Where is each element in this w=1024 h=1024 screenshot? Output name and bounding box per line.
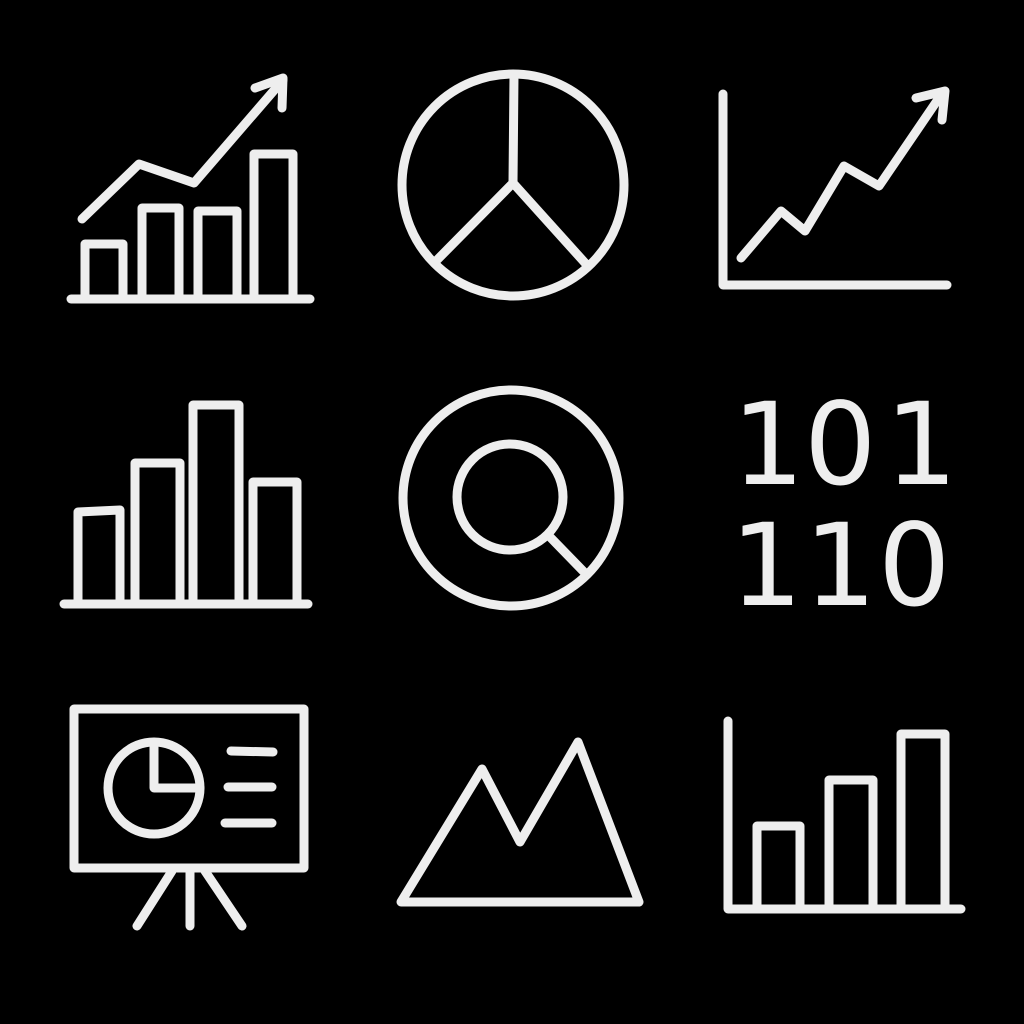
icon: bar chart with axes — [728, 721, 961, 909]
icon: binary digits — [730, 378, 958, 632]
icon: binary digits: 110 — [730, 499, 951, 632]
icon: pie chart — [402, 74, 624, 296]
icon: bar chart — [64, 405, 308, 604]
icon: bar chart with rising arrow — [71, 78, 310, 299]
icon: mountain area chart — [401, 742, 639, 902]
icon: presentation board — [74, 709, 304, 926]
icon: binary digits: 101 — [732, 378, 958, 511]
icon: line chart with arrow — [723, 91, 947, 285]
icon: magnifying glass in circle — [403, 390, 619, 606]
